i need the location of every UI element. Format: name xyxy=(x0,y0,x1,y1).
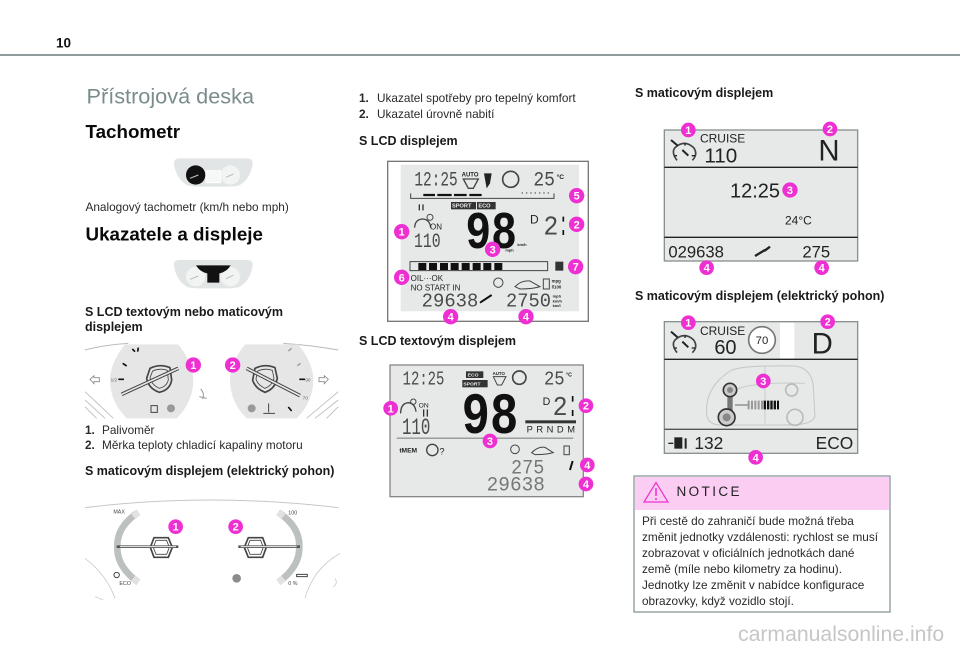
badge 1 xyxy=(383,401,398,416)
gauges: energy and charge: 100 xyxy=(288,510,297,516)
gauges: energy and charge: MAX xyxy=(113,509,125,515)
badge 3 xyxy=(483,434,497,448)
badge 4 xyxy=(443,309,458,324)
panel: LCD text display: °C xyxy=(566,373,572,379)
heading: Tachometr: Tachometr xyxy=(86,121,181,142)
panel: LCD display: mph xyxy=(505,248,514,253)
clock: 12:25 xyxy=(403,369,444,391)
badge 3 xyxy=(485,242,500,257)
panel: matrix display electric xyxy=(664,314,858,465)
badge 1 xyxy=(681,315,696,330)
legend: consumption and charge: Ukazatel úrovně nabití xyxy=(377,107,495,121)
panel: matrix display electric: D xyxy=(812,327,833,360)
needle 1 xyxy=(122,366,178,394)
notice body xyxy=(642,514,879,608)
badge 4 xyxy=(579,477,593,491)
panel: LCD display: mph xyxy=(553,294,562,299)
badge 1: 1 xyxy=(388,403,394,415)
panel: LCD text display: PRNDM xyxy=(527,425,575,435)
badge 4: 4 xyxy=(523,312,530,324)
subheading: LCD display: S LCD displejem xyxy=(359,134,458,148)
badge 7 xyxy=(568,259,583,274)
panel: matrix display: 029638 xyxy=(668,243,724,262)
notice body: obrazovky, když vozidlo stojí. xyxy=(642,594,794,608)
panel: matrix display: 24°C xyxy=(785,213,812,227)
badge 7: 7 xyxy=(573,262,579,274)
badge 4: 4 xyxy=(753,452,760,464)
badge 3: 3 xyxy=(487,436,493,448)
callout: notice xyxy=(634,476,890,612)
panel: LCD text display: AUTO xyxy=(493,371,505,376)
notice body: Jednotky lze změnit v nabídce konfigurace xyxy=(642,578,865,592)
badge 6 xyxy=(394,270,409,285)
badge 2: 2 xyxy=(825,317,831,329)
panel: LCD text display: tMEM xyxy=(399,448,418,455)
needle 1 xyxy=(117,538,178,557)
van illustration xyxy=(707,366,815,426)
gauges: fuel and coolant temperature: 90 xyxy=(305,377,311,382)
badge 2: 2 xyxy=(233,522,239,534)
panel: LCD display: km/h xyxy=(517,242,527,247)
panel: LCD display: 2 xyxy=(543,213,558,243)
legend: consumption and charge: 1. xyxy=(359,91,369,105)
icon: dashboard with display highlighted xyxy=(174,260,253,288)
badge 6: 6 xyxy=(399,272,405,284)
badge 2 xyxy=(225,357,240,373)
panel: LCD text display: 2 xyxy=(553,394,568,424)
badge 2 xyxy=(569,217,584,232)
speed: 98 xyxy=(462,386,518,451)
panel: LCD display: 110 xyxy=(414,231,441,254)
badge 2 xyxy=(820,314,835,329)
trip: 2750 xyxy=(506,291,551,313)
panel: LCD display: l/100 xyxy=(552,284,562,289)
panel: matrix display electric: 60 xyxy=(714,337,737,359)
notice body: země (míle nebo kilometry za hodinu). xyxy=(642,562,842,576)
panel: LCD text display: ON xyxy=(419,402,429,409)
panel: LCD display: ECO xyxy=(478,204,491,210)
legend: consumption and charge xyxy=(359,91,576,121)
panel: LCD display: ON xyxy=(430,223,442,232)
panel: LCD display: NO START IN xyxy=(411,283,461,292)
icon: dashboard with speedometer highlighted xyxy=(174,158,253,187)
badge 3: 3 xyxy=(490,244,496,256)
watermark: carmanualsonline.info xyxy=(738,623,944,646)
badge 1: 1 xyxy=(190,360,196,372)
badge 3: 3 xyxy=(787,185,793,197)
badge 4: 4 xyxy=(819,263,826,275)
clock: 12:25 xyxy=(414,170,458,193)
notice heading: NOTICE xyxy=(676,484,742,499)
panel: LCD display: AUTO xyxy=(462,173,479,179)
gauges: fuel and coolant temperature: 1/2 xyxy=(111,377,118,382)
badge 4 xyxy=(580,458,595,472)
gauges: energy and charge xyxy=(85,500,340,600)
icon: warning triangle xyxy=(644,482,668,502)
temperature: 25 xyxy=(544,369,565,391)
icon: cruise speedometer xyxy=(671,332,696,353)
badge 4 xyxy=(699,260,714,275)
panel: LCD display: °C xyxy=(557,173,564,181)
legend: fuel and coolant: 2. xyxy=(85,438,95,452)
page number: 10 xyxy=(56,36,71,50)
badge 2: 2 xyxy=(574,219,580,231)
badge 2 xyxy=(823,122,837,136)
badge 4: 4 xyxy=(583,479,590,491)
subheading: LCD text or matrix display: S LCD textovým nebo maticovým xyxy=(85,305,283,319)
gauges: fuel and coolant temperature xyxy=(85,343,338,418)
legend: fuel and coolant: Měrka teploty chladicí kapaliny motoru xyxy=(102,438,303,452)
panel: matrix display: 275 xyxy=(802,243,830,262)
title: Přístrojová deska xyxy=(86,84,255,108)
panel: LCD display: km/l xyxy=(553,303,561,308)
badge 3: 3 xyxy=(760,376,766,388)
panel: LCD text display: D xyxy=(543,396,551,408)
needle 2 xyxy=(247,366,300,396)
panel: matrix display: N xyxy=(818,134,840,167)
panel: matrix display: 110 xyxy=(704,144,737,167)
badge 1 xyxy=(681,123,696,137)
panel: LCD display: D xyxy=(530,213,539,227)
odometer: 29638 xyxy=(422,291,478,313)
badge 4 xyxy=(518,309,534,324)
badge 5 xyxy=(569,188,584,203)
panel: LCD display: SPORT xyxy=(452,204,472,210)
badge 1: 1 xyxy=(399,227,405,239)
icon: cruise speedometer xyxy=(671,140,696,160)
badge 2: 2 xyxy=(230,360,236,372)
badge 4 xyxy=(814,260,829,275)
legend: fuel and coolant xyxy=(85,423,303,452)
subheading: LCD text or matrix display: displejem xyxy=(85,320,143,334)
panel: matrix display: 12:25 xyxy=(730,181,780,203)
gauges: fuel and coolant temperature: 70 xyxy=(303,395,308,400)
panel: matrix display: CRUISE xyxy=(700,132,745,146)
notice body: změnit jednotky vzdálenosti: rychlost se musí xyxy=(642,530,879,544)
panel: LCD display xyxy=(388,161,588,324)
badge 2: 2 xyxy=(827,124,833,136)
subheading: LCD text display: S LCD textovým displejem xyxy=(359,334,516,348)
subheading: matrix display: S maticovým displejem xyxy=(635,86,773,100)
panel: matrix display electric: ECO xyxy=(816,433,853,453)
subheading: matrix display electric: S maticovým displejem (elektrický pohon) xyxy=(635,289,884,303)
panel: matrix display electric: 70 xyxy=(756,335,768,347)
gauges: energy and charge: 0 % xyxy=(288,581,298,587)
badge 3 xyxy=(756,374,771,388)
legend: fuel and coolant: Palivoměr xyxy=(102,423,155,437)
panel: LCD text display: SPORT xyxy=(463,382,480,388)
badge 2 xyxy=(579,398,593,413)
badge 1 xyxy=(186,357,201,373)
needle 2 xyxy=(238,538,300,557)
badge 1: 1 xyxy=(173,522,179,534)
badge 1 xyxy=(168,519,183,534)
panel: LCD display: mpg xyxy=(552,278,561,283)
panel: LCD display: OIL···OK xyxy=(411,274,444,283)
badge 4 xyxy=(748,450,763,465)
panel: LCD text display: ECO xyxy=(468,373,479,379)
badge 4: 4 xyxy=(584,460,591,472)
notice body: Při cestě do zahraničí bude možná třeba xyxy=(642,514,854,528)
panel: LCD text display: ? xyxy=(439,446,445,456)
subheading: LCD text or matrix display xyxy=(85,305,283,334)
legend: consumption and charge: Ukazatel spotřeby pro tepelný komfort xyxy=(377,91,576,105)
badge 1: 1 xyxy=(685,125,691,137)
panel: LCD text display: 275 xyxy=(511,457,544,480)
badge 2 xyxy=(228,519,243,534)
panel: matrix display electric: CRUISE xyxy=(700,324,745,338)
badge 1 xyxy=(394,224,409,239)
badge 4: 4 xyxy=(704,263,711,275)
legend: fuel and coolant: 1. xyxy=(85,423,95,437)
panel: LCD display: km/h xyxy=(553,298,563,303)
text: analog speedometer: Analogový tachometr (km/h nebo mph) xyxy=(86,200,289,214)
badge 3 xyxy=(782,182,798,198)
notice body: zobrazovat v oficiálních jednotkách dané xyxy=(642,546,855,560)
badge 2: 2 xyxy=(583,401,589,413)
badge 5: 5 xyxy=(574,191,580,203)
panel: matrix display electric: 132 xyxy=(694,433,723,453)
badge 1: 1 xyxy=(685,318,691,330)
panel: LCD text display: 110 xyxy=(402,415,430,441)
gauges: energy and charge: ECO xyxy=(119,581,131,587)
panel: LCD text display xyxy=(383,365,595,498)
heading: Ukazatele a displeje: Ukazatele a displeje xyxy=(86,224,263,244)
panel: matrix display xyxy=(664,122,858,275)
badge 4: 4 xyxy=(448,312,455,324)
subheading: matrix display electric: S maticovým displejem (elektrický pohon) xyxy=(85,464,334,478)
panel: LCD text display: 29638 xyxy=(487,475,545,498)
legend: consumption and charge: 2. xyxy=(359,107,369,121)
speed: 98 xyxy=(465,204,517,264)
temperature: 25 xyxy=(533,170,555,193)
